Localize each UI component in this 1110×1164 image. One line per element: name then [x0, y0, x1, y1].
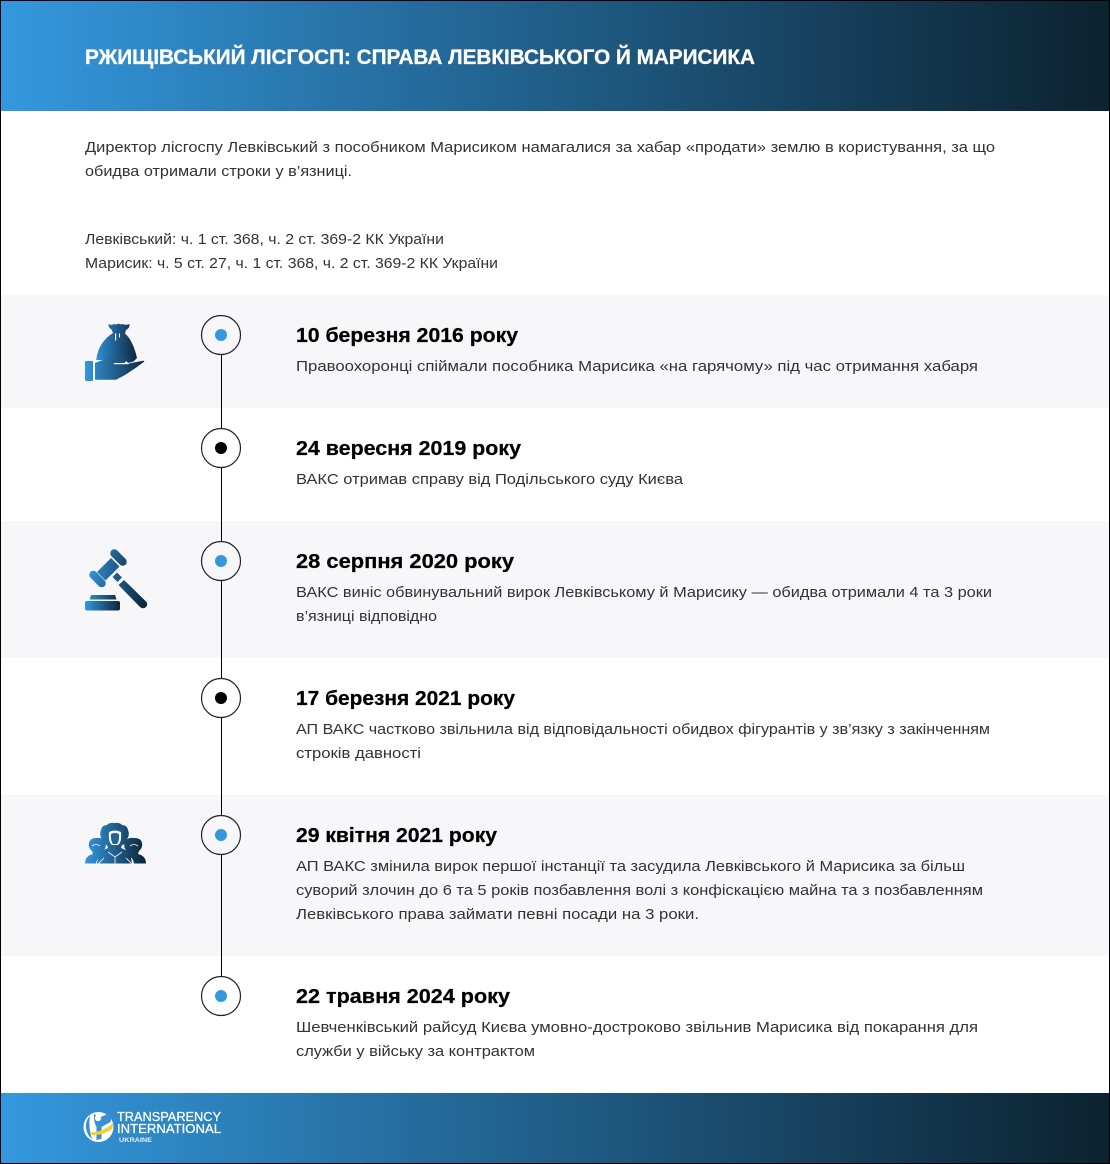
- marker: 2016: [202, 316, 240, 354]
- event: 29 April 2021: суворий злочин до 6 та 5 років позбавлення волі з конфіскацією майна та з позбавленням: [296, 882, 983, 899]
- title: РЖИЩІВСЬКИЙ ЛІСГОСП: СПРАВА ЛЕВКІВСЬКОГО Й МАРИСИКА: [85, 44, 755, 69]
- event: 28 August 2020: в’язниці відповідно: [296, 608, 437, 625]
- marker: April 2021: [202, 816, 240, 854]
- event: 10 March 2016: [296, 324, 978, 375]
- event: 24 September 2019: 24 вересня 2019 року: [296, 437, 522, 460]
- icon: group of people: [85, 823, 146, 864]
- logo: Transparency International Ukraine: INTERNATIONAL: [117, 1122, 221, 1136]
- event: 22 May 2024: служби у війську за контрактом: [296, 1043, 535, 1060]
- legal articles: Марисик: ч. 5 ст. 27, ч. 1 ст. 368, ч. 2 ст. 369-2 КК України: [85, 255, 498, 272]
- intro text: Директор лісгоспу Левківський з пособником Марисиком намагалися за хабар «продати» землю в користування, за що: [85, 139, 995, 156]
- event: 29 April 2021: Левківського права займати певні посади на 3 роки.: [296, 906, 699, 923]
- event: 22 May 2024: [296, 985, 978, 1060]
- event: 28 August 2020: [296, 550, 992, 625]
- event: 17 March 2021: 17 березня 2021 року: [296, 687, 516, 710]
- event: 28 August 2020: 28 серпня 2020 року: [296, 550, 515, 573]
- event: 24 September 2019: ВАКС отримав справу від Подільського суду Києва: [296, 471, 684, 488]
- logo: Transparency International Ukraine: TRANSPARENCY: [117, 1110, 222, 1124]
- panel: row 1 background: [1, 295, 1109, 408]
- marker: 2019: [202, 428, 240, 468]
- event: 10 March 2016: 10 березня 2016 року: [296, 324, 519, 347]
- intro text: [85, 139, 995, 180]
- event: 29 April 2021: 29 квітня 2021 року: [296, 824, 498, 847]
- event: 17 March 2021: строків давності: [296, 745, 421, 762]
- marker: 2024: [202, 976, 240, 1016]
- logo: Transparency International Ukraine: UKRAINE: [119, 1137, 153, 1144]
- header band: [1, 1, 1109, 111]
- footer band: [1, 1093, 1109, 1163]
- event: 29 April 2021: АП ВАКС змінила вирок першої інстанції та засудила Левківського й Марисика за більш: [296, 858, 965, 875]
- panel: row 5 background: [1, 795, 1109, 956]
- marker: 2020: [202, 542, 240, 580]
- event: 22 May 2024: 22 травня 2024 року: [296, 985, 511, 1008]
- event: 10 March 2016: Правоохоронці спіймали пособника Марисика «на гарячому» під час отримання хабаря: [296, 358, 978, 375]
- event: 28 August 2020: ВАКС виніс обвинувальний вирок Левківському й Марисику — обидва отримали 4 та 3 роки: [296, 584, 992, 601]
- event: 17 March 2021: АП ВАКС частково звільнила від відповідальності обидвох фігурантів у зв’язку з закінченням: [296, 721, 990, 738]
- event: 22 May 2024: Шевченківський райсуд Києва умовно-достроково звільнив Марисика від покарання для: [296, 1019, 978, 1036]
- legal articles: [85, 231, 498, 272]
- icon: money bag in hand: [85, 324, 147, 382]
- legal articles: Левківський: ч. 1 ст. 368, ч. 2 ст. 369-2 КК України: [85, 231, 444, 248]
- event: 24 September 2019: [296, 437, 684, 488]
- icon: gavel: [85, 548, 147, 610]
- timeline line: [221, 335, 222, 996]
- event: 17 March 2021: [296, 687, 990, 762]
- marker: March 2021: [202, 678, 240, 718]
- intro text: обидва отримали строки у в’язниці.: [85, 163, 352, 180]
- panel: row 3 background: [1, 521, 1109, 658]
- logo: Transparency International Ukraine: [84, 1110, 222, 1144]
- event: 29 April 2021: [296, 824, 983, 923]
